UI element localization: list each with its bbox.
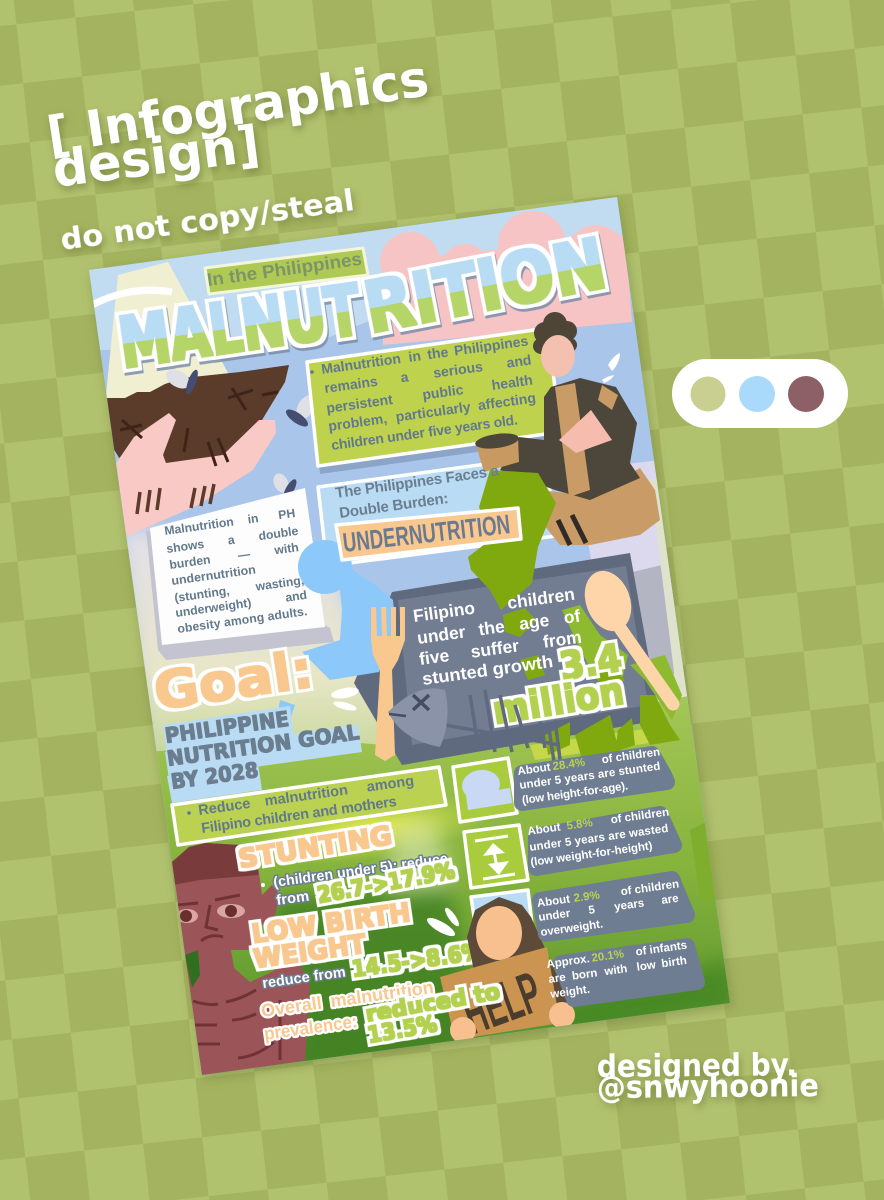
goal: overall prevalence: [260, 977, 502, 1049]
goal: low birth weight: WEIGHT: [252, 929, 368, 975]
stat icon: tape measure: [453, 758, 517, 822]
neck shadow: [185, 950, 200, 988]
sign text: HELP: [454, 959, 550, 1047]
double burden panel: [318, 456, 556, 566]
heading: Philippine nutrition goal by 2028: PHILIPPINE: [163, 707, 290, 748]
title: MALNUTRITION: [114, 231, 612, 376]
goal panel: [172, 767, 446, 845]
page heading: [ Infographics: [43, 49, 432, 165]
text block: double burden note: underweight): [174, 596, 252, 620]
intro panel: persistent: [325, 391, 394, 416]
stat card: stunted: of children: [601, 746, 661, 766]
intro panel: [307, 328, 563, 474]
intro panel: particularly: [395, 398, 472, 425]
tray text: five: [418, 645, 451, 669]
stat card: low birth weight: of infants: [635, 940, 688, 959]
hair: [467, 897, 571, 1007]
illustration: hand holding broken bowl: [107, 365, 289, 536]
intro panel: public: [421, 381, 465, 403]
eyes: [176, 904, 245, 923]
hand: [110, 413, 276, 536]
goal: stunting: (children under 5): reduce: [272, 851, 449, 891]
stat card: overweight: 5: [588, 904, 596, 917]
intro panel: remains: [323, 373, 379, 396]
text block: double burden note: [150, 488, 325, 645]
tray text: children: [506, 584, 576, 613]
text block: double burden note: a: [227, 533, 236, 547]
finger marks: [137, 484, 214, 514]
UNDERNUTRITION label: [336, 508, 521, 560]
torso: [500, 378, 640, 500]
stat card: overweight: [536, 878, 687, 939]
bowl held out: [474, 431, 520, 472]
designer credit: designed by.: [597, 1047, 797, 1085]
spoon: [577, 564, 673, 704]
stat card: low birth weight: born: [571, 967, 598, 983]
foot strap: [558, 515, 586, 545]
intro panel: in: [407, 347, 422, 365]
forearm: [559, 410, 612, 453]
tray text: [414, 590, 582, 685]
blue kneeling figure: [278, 540, 394, 716]
goal: overall prevalence: 13.5%: [366, 1012, 439, 1049]
goal: stunting: 26.7->17.9%: [316, 859, 457, 909]
stat: 3.4 million: [490, 636, 627, 733]
heading: Philippine nutrition goal by 2028: NUTRITION GOAL: [165, 720, 361, 771]
label: In the Philippines: In the Philippines: [206, 249, 363, 290]
shoulder patch: [598, 385, 618, 410]
fish skeleton: [388, 688, 562, 760]
goal: low birth weight: 14.5->8.6%: [350, 940, 484, 983]
designer credit: [597, 1047, 819, 1106]
flies: [166, 370, 311, 494]
girl with help sign: [440, 897, 575, 1047]
text block: double burden note: wasting,: [254, 573, 305, 594]
goal: low birth weight: reduce from: [261, 964, 347, 992]
text block: double burden note: burden: [168, 552, 211, 572]
text block: double burden note: Malnutrition: [163, 515, 234, 538]
text block: double burden note: double: [258, 524, 299, 543]
stat card: stunted: 28.4%: [552, 757, 586, 773]
illustration: seated man with bowl: [474, 312, 660, 545]
stat card: low birth weight: birth: [661, 955, 688, 970]
stat card: low birth weight: weight.: [549, 984, 591, 1001]
pupils: [180, 905, 237, 922]
goal panel: Filipino children and mothers: [200, 794, 398, 837]
face and rib lines: [178, 895, 280, 1060]
poster backdrop: [80, 190, 740, 1090]
tray text: the: [477, 616, 506, 639]
text block: double burden note: shows: [165, 537, 205, 556]
stat card: low birth weight: are: [548, 972, 567, 986]
hair: [172, 843, 258, 885]
stat card: low birth weight: Approx.: [546, 953, 590, 971]
goal: stunting: [236, 821, 457, 909]
stat card: stunted: About: [517, 761, 551, 778]
stat: 3.4 million: million: [490, 669, 627, 733]
poster shadow: [89, 197, 730, 1075]
intro panel: health: [491, 372, 534, 393]
stat card: low birth weight: with: [603, 963, 628, 978]
text block: double burden note: PH: [277, 506, 296, 522]
face: [476, 906, 522, 960]
bowl stitches: [120, 388, 278, 466]
text block: double burden note: (stunting,: [173, 583, 230, 605]
stat card: overweight: About: [536, 893, 571, 910]
tray text: of: [562, 606, 582, 628]
intro panel: children under five years old.: [330, 411, 519, 453]
stat card: overweight: are: [661, 893, 679, 907]
stat card: wasted: About: [527, 821, 561, 838]
grass field: [150, 690, 745, 1085]
title: MALNUTRITION: MALNUT: [114, 269, 366, 385]
intro panel: the: [426, 344, 449, 362]
goal panel: among: [366, 773, 415, 796]
stat card: stunted: under 5 years are stunted: [519, 761, 661, 792]
text block: double burden note: undernutrition: [170, 562, 257, 588]
stat card: low birth weight: [546, 940, 697, 1001]
goal: overall prevalence: Overall: [260, 993, 323, 1021]
face: [541, 335, 575, 377]
goal: stunting: STUNTING: [236, 821, 394, 875]
colour palette pill: [672, 359, 848, 428]
stat card: overweight: overweight.: [540, 918, 604, 939]
pink clouds: [380, 211, 632, 345]
goal: stunting: from: [275, 889, 310, 909]
heading: Philippine nutrition goal by 2028: BY 2028: [169, 758, 260, 794]
page heading: design]: [49, 115, 263, 199]
goal: overall prevalence: reduced to: [364, 980, 502, 1028]
heading: Goal: Goal:: [150, 640, 317, 723]
statue figure: [172, 843, 310, 1080]
intro panel: a: [399, 368, 410, 385]
intro panel: serious: [432, 358, 484, 381]
stat card: wasted: of children: [610, 806, 670, 826]
grey note shadow: [146, 530, 334, 660]
goal: overall prevalence: prevalence:: [263, 1011, 359, 1044]
stat icon: height arrows: [464, 825, 528, 888]
spotlight arrow: [92, 290, 172, 305]
stat card: low birth weight: 20.1%: [591, 948, 625, 965]
copy notice: do not copy/steal: [58, 183, 356, 257]
Philippine map: [468, 470, 682, 770]
stat card: wasted: [527, 806, 674, 869]
text block: double burden note: and: [284, 588, 308, 605]
fork: [371, 607, 405, 761]
legs: [540, 468, 660, 545]
text block: double burden note: in: [247, 511, 259, 526]
double burden text: Double Burden:: [338, 490, 450, 522]
double burden text: The Philippines Faces a: [334, 462, 501, 502]
tray text: suffer: [469, 635, 520, 662]
stat card: wasted: (low weight-for-height): [530, 840, 653, 869]
hands: [450, 1002, 575, 1043]
water drops: [602, 353, 620, 383]
double burden text: [334, 462, 521, 560]
stat card: low birth weight: low: [636, 959, 657, 974]
tray text: age: [518, 610, 551, 634]
tray text: from: [542, 627, 583, 652]
goal: low birth weight: LOW BIRTH: [250, 898, 412, 950]
intro panel: Philippines: [453, 332, 529, 359]
intro panel: Malnutrition: [320, 350, 402, 377]
intro panel: problem,: [327, 410, 388, 434]
stat card: overweight: under: [538, 908, 572, 924]
designer credit: @snwyhoonie: [597, 1068, 819, 1106]
stat card: overweight: of children: [620, 878, 680, 898]
stat card: overweight: 2.9%: [573, 889, 601, 905]
tray: [354, 553, 660, 765]
intro panel: affecting: [477, 389, 537, 413]
hair: [533, 312, 577, 354]
goal panel: malnutrition: [264, 782, 349, 810]
text block: double burden note: obesity among adults.: [176, 604, 308, 636]
goal: low birth weight: [250, 898, 484, 992]
goal panel: Reduce: [197, 796, 251, 819]
stat card: overweight: years: [614, 897, 645, 913]
stat card: stunted: [517, 746, 667, 807]
tray text: stunted growth: [421, 651, 554, 689]
goal: overall prevalence: malnutrition: [329, 977, 435, 1011]
stat: 3.4 million: 3.4: [557, 636, 625, 689]
white leaves: [425, 906, 461, 939]
stat card: wasted: under 5 years are wasted: [529, 823, 669, 854]
UNDERNUTRITION label: UNDERNUTRITION: [341, 509, 512, 558]
splash marks: [331, 688, 359, 711]
text block: double burden note: with: [272, 540, 300, 558]
tray text: Filipino: [412, 598, 476, 626]
sign: [440, 947, 560, 1040]
title: MALNUTRITION: RITION: [358, 223, 613, 350]
text block: double burden note: —: [237, 547, 252, 562]
strap: [555, 383, 590, 497]
stat card: stunted: (low height-for-age).: [521, 780, 629, 807]
intro panel: and: [505, 351, 532, 371]
stat icon: overweight: [471, 890, 535, 955]
bowl: [107, 365, 289, 463]
tray text: under: [416, 621, 467, 648]
poster: [80, 190, 745, 1090]
stat card: wasted: 5.8%: [566, 817, 594, 833]
heading: Philippine nutrition goal by 2028: [163, 706, 362, 803]
